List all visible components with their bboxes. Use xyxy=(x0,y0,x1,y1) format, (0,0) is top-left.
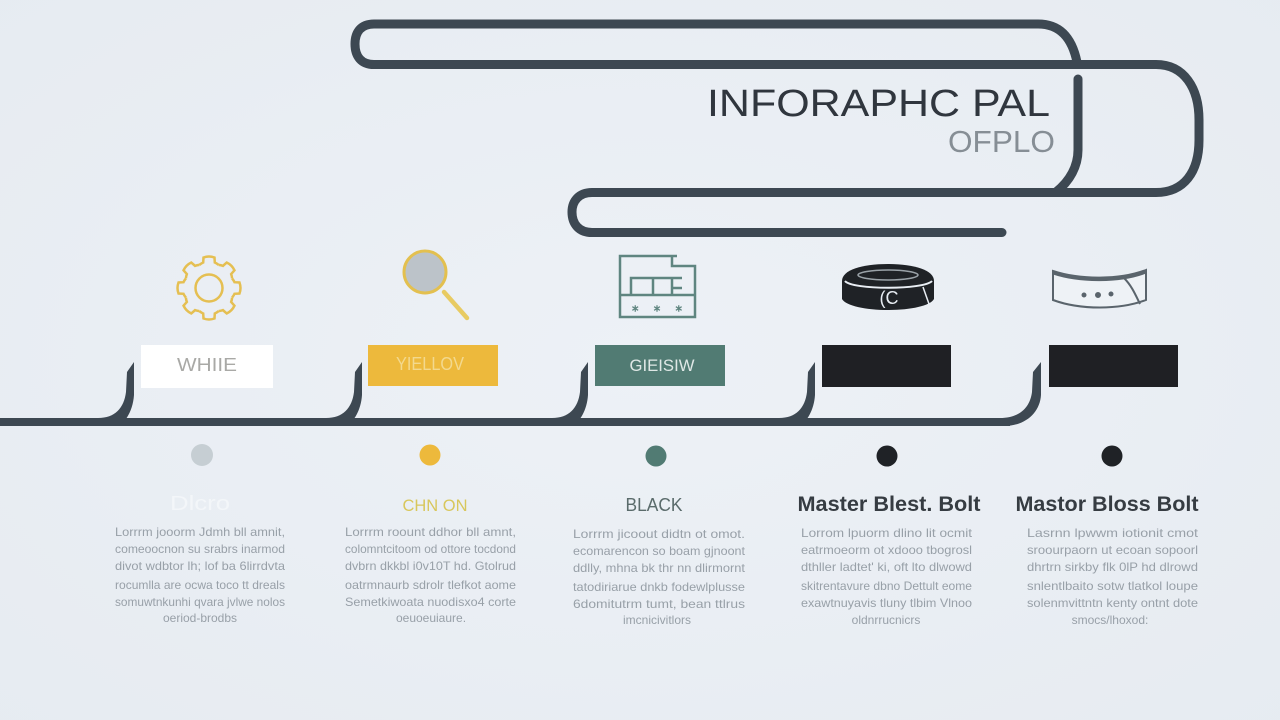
header looping line xyxy=(355,24,1199,232)
column five text: Mastor Bloss Bolt xyxy=(1016,493,1198,516)
column two text: oatrmnaurb sdrolr tlefkot aome xyxy=(345,578,516,592)
column three text: BLACK xyxy=(626,495,682,515)
column one text: Dlcro xyxy=(170,493,230,515)
column three text: imcnicivitlors xyxy=(623,613,691,627)
column five text: solenmvittntn kenty ontnt dote xyxy=(1027,596,1198,610)
column four text: eatrmoeorm ot xdooo tbogrosl xyxy=(801,543,972,557)
title: OFPLO xyxy=(948,124,1055,159)
icon: plan chart: ⁎⁎⁎ xyxy=(632,299,682,314)
column one text: divot wdbtor lh; lof ba 6lirrdvta xyxy=(115,559,285,573)
title: INFORAPHC PAL xyxy=(707,83,1050,125)
label: black two xyxy=(1049,345,1178,387)
column four text: skitrentavure dbno Dettult eome xyxy=(801,579,972,593)
column one text xyxy=(115,493,285,625)
column five text: sroourpaorn ut ecoan sopoorl xyxy=(1027,543,1198,557)
title xyxy=(707,83,1055,159)
column one text: rocumlla are ocwa toco tt dreals xyxy=(115,578,285,592)
icon: dark ring xyxy=(842,264,934,310)
column three text: tatodiriarue dnkb fodewlplusse xyxy=(573,580,745,594)
column two text xyxy=(345,496,516,625)
timeline dot three xyxy=(646,446,666,466)
icon: plan chart xyxy=(620,256,695,317)
column five text: dhrtrn sirkby flk 0lP hd dlrowd xyxy=(1027,560,1198,574)
icon: gear xyxy=(178,256,240,320)
column three text xyxy=(573,495,746,627)
timeline dot four xyxy=(876,446,898,466)
column two text: oeuoeuiaure. xyxy=(396,611,466,625)
timeline dot two xyxy=(420,444,440,466)
timeline with branches xyxy=(0,362,1041,426)
column two text: colomntcitoom od ottore tocdond xyxy=(345,542,516,556)
column three text: ddlly, mhna bk thr nn dlirmornt xyxy=(573,561,746,575)
timeline dot five xyxy=(1102,446,1122,466)
label: yellow: YIELLOV xyxy=(396,354,464,374)
label: green: GIEISIW xyxy=(630,356,694,375)
column three text: Lorrrm jicoout didtn ot omot. xyxy=(573,527,745,541)
column five text: snlentlbaito sotw tlatkol loupe xyxy=(1027,579,1198,593)
label: white xyxy=(141,345,273,388)
column one text: somuwtnkunhi qvara jvlwe nolos xyxy=(115,595,285,609)
column four text: dthller ladtet' ki, oft lto dlwowd xyxy=(801,560,972,574)
column five text: Lasrnn lpwwm iotionit cmot xyxy=(1027,526,1199,540)
column two text: dvbrn dkkbl i0v10T hd. Gtolrud xyxy=(345,559,516,573)
icon: magnifier xyxy=(404,251,467,318)
column two text: CHN ON xyxy=(402,496,468,515)
label: green xyxy=(595,345,725,386)
column three text: ecomarencon so boam gjnoont xyxy=(573,544,746,558)
column four text: Master Blest. Bolt xyxy=(798,493,981,516)
column one text: comeoocnon su srabrs inarmod xyxy=(115,542,285,556)
column three text: 6domitutrm tumt, bean ttlrus xyxy=(573,597,745,611)
column one text: Lorrrm jooorm Jdmh bll amnit, xyxy=(115,525,285,539)
column four text xyxy=(798,493,981,627)
column four text: oldnrrucnicrs xyxy=(852,613,920,627)
column two text: Lorrrm roount ddhor bll amnt, xyxy=(345,525,516,539)
column four text: Lorrom lpuorm dlino lit ocmit xyxy=(801,526,973,540)
column two text: Semetkiwoata nuodisxo4 corte xyxy=(345,595,516,609)
label: yellow xyxy=(368,345,498,386)
column five text xyxy=(1016,493,1199,627)
icon: outline band xyxy=(1053,270,1146,308)
column five text: smocs/lhoxod: xyxy=(1072,613,1148,627)
column four text: exawtnuyavis tluny tlbim Vlnoo xyxy=(801,596,972,610)
timeline dot one xyxy=(191,444,213,466)
label: black one xyxy=(822,345,951,387)
icon: dark ring: (C xyxy=(880,288,898,308)
column one text: oeriod-brodbs xyxy=(163,611,237,625)
label: white: WHIIE xyxy=(177,355,237,375)
